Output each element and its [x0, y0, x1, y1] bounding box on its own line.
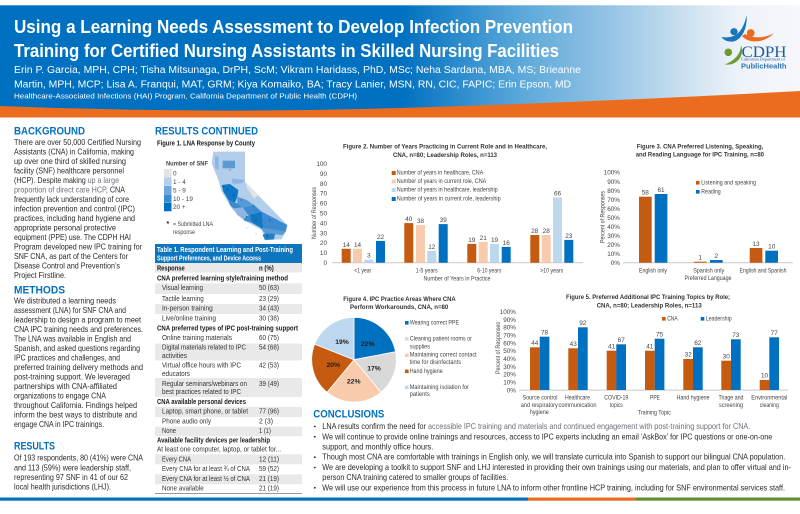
table rows: CNA preferred learning style/training method	[157, 275, 288, 282]
figure 2 values: 40	[405, 216, 413, 223]
figure 3 y axis: 90%	[607, 179, 620, 186]
chart: figure 5	[495, 294, 788, 417]
background text: proportion of direct care HCP, CNA	[14, 184, 125, 194]
background text: Program developed new IPC training for	[14, 242, 142, 252]
figure 3 y axis: 10%	[607, 251, 620, 258]
methods text: partnerships with CNA-affiliated	[14, 381, 117, 391]
table rows: 21 (19)	[259, 486, 279, 493]
methods text: The LNA was available in English and	[14, 334, 131, 344]
map legend: = Submitted LNA	[173, 221, 214, 228]
methods text: engage CNA in IPC trainings.	[14, 419, 104, 429]
table rows: activities	[162, 353, 187, 360]
table rows: Available facility devices per leadership	[157, 438, 270, 445]
background text: frequently lack understanding of core	[14, 194, 129, 204]
figure 5 values: 77	[771, 330, 778, 337]
table rows: None available	[162, 486, 204, 493]
heading: methods: METHODS	[14, 284, 65, 296]
icon: CDPH logo	[722, 15, 787, 70]
figure 2 legend: Number of years in healthcare, leadership	[397, 187, 498, 194]
figure 5 values: 44	[531, 340, 539, 347]
figure 5 values: 41	[608, 343, 615, 350]
pie legend: time for disinfectants	[410, 359, 461, 366]
figure 2 categories: Number of Years in Practice	[424, 275, 491, 282]
figure 2 legend: Number of years in current role, leadership	[397, 196, 501, 203]
figure 3 y axis: 20%	[607, 242, 620, 249]
conclusions bullets: person CNA training catered to smaller groups of facilities.	[322, 472, 508, 482]
header banner	[0, 5, 800, 117]
figure 2 title	[343, 143, 547, 159]
pie legend: Hand hygiene	[410, 368, 443, 375]
pie legend: Maintaining isolation for	[410, 384, 470, 391]
table rows: 21 (19)	[259, 476, 279, 483]
background text: practices, including hand hygiene and	[14, 213, 135, 223]
figure 2 y axis: 100	[316, 161, 327, 168]
figure 2 y axis: 60	[320, 201, 327, 208]
figure 5 categories: Training Topic	[638, 410, 671, 417]
methods text: Spanish, and asked questions regarding	[14, 343, 140, 353]
figure 5 y axis: 80%	[503, 325, 516, 332]
figure 3 legend: Reading	[701, 189, 721, 196]
figure 2 values: 21	[480, 235, 487, 242]
figure 5 values: 67	[618, 337, 625, 344]
table rows: 60 (75)	[259, 335, 279, 342]
figure 3 title	[636, 143, 764, 159]
figure 5 y axis: 70%	[503, 332, 516, 340]
figure 5 y axis: 60%	[503, 340, 516, 347]
pie legend	[405, 320, 477, 398]
conclusions bullets: LNA results confirm the need for accessible IPC training and materials and continued engagement with post-training support for CNA.	[322, 421, 750, 431]
pie labels	[326, 339, 381, 386]
authors: Erin P. Garcia, MPH, CPH; Tisha Mitsunaga, DrPH, ScM; Vikram Haridass, PhD, MSc; Neha Sardana, MBA, MS; Brieanne	[14, 65, 581, 76]
figure 2 values: 28	[531, 228, 539, 235]
figure 3 y axis: Percent of Responses	[600, 191, 606, 243]
map legend: response	[173, 229, 195, 236]
figure 3 categories: English and Spanish	[740, 267, 787, 274]
figure 5 categories: COVID-19	[604, 394, 629, 401]
figure 2 y axis: 30	[320, 230, 327, 237]
figure 3 y axis	[600, 170, 793, 267]
table header: Support Preferences, and Device Access	[157, 256, 261, 262]
figure 5 values: 78	[541, 329, 548, 336]
figure 1 title: Figure 1. LNA Response by County	[157, 141, 255, 148]
panel: table 1	[155, 244, 302, 494]
map legend: *	[166, 221, 170, 228]
panel: left column	[14, 126, 143, 491]
table header: Table 1. Respondent Learning and Post-Training	[157, 247, 293, 254]
figure 5 values: 10	[761, 373, 768, 380]
figure 3 values: 61	[657, 187, 665, 194]
figure 2 y axis: 90	[320, 171, 327, 178]
figure 5 values: 30	[723, 353, 730, 360]
figure 3 values: 1	[699, 255, 703, 262]
figure 2 values: 14	[343, 242, 350, 249]
background text: facility (SNF) healthcare personnel	[14, 166, 124, 176]
figure 5 values	[531, 320, 778, 380]
figure 2 values: 22	[377, 234, 384, 241]
map legend: 5 - 9	[173, 188, 186, 194]
table rows: 1 (1)	[259, 428, 271, 435]
background text: Assistants (CNA) in California, making	[14, 146, 134, 156]
figure 5 y axis: 90%	[503, 317, 516, 324]
background text: There are over 50,000 Certified Nursing	[14, 137, 141, 147]
figure 2 y axis: 20	[320, 240, 327, 247]
table rows: 50 (63)	[259, 285, 279, 292]
figure 3 title: and Reading Language for IPC Training, n=80	[636, 152, 764, 159]
table rows: best practices related to IPC	[162, 389, 241, 396]
results text: representing 97 SNF in 41 of our 62	[14, 472, 128, 482]
figure 2 y axis: 0	[323, 260, 327, 267]
table rows: Tactile learning	[162, 296, 204, 303]
table rows: educators	[162, 371, 190, 378]
table rows: 12 (11)	[259, 456, 279, 463]
results text	[14, 453, 143, 492]
figure 2 legend	[392, 170, 501, 203]
table rows: Every CNA	[162, 456, 191, 463]
pie labels: 19%	[335, 339, 349, 346]
figure 2 categories: 1-5 years	[416, 267, 438, 274]
figure 2 values: 14	[354, 242, 361, 249]
figure 3 values	[642, 187, 776, 262]
figure 5 categories: topics	[610, 402, 623, 409]
pie labels: 20%	[326, 362, 340, 369]
methods text: CNA IPC training needs and preferences.	[14, 324, 143, 334]
map legend: Number of SNF	[166, 161, 208, 168]
figure 2 categories	[354, 267, 563, 282]
table rows: Laptop, smart phone, or tablet	[162, 408, 248, 415]
figure 2 categories: >10 years	[540, 267, 563, 274]
figure 5 categories: PPE	[650, 394, 660, 401]
figure 5 y axis: 0%	[507, 387, 516, 394]
table header	[155, 244, 302, 263]
figure 4 title: Figure 4. IPC Practice Areas Where CNA	[343, 296, 456, 303]
figure 2 bars	[342, 197, 573, 263]
icon: CDPH logo: PublicHealth	[741, 61, 787, 70]
footer colour bar	[0, 498, 800, 501]
figure 5 categories: Triage and	[718, 394, 744, 401]
figure 2 title: Figure 2. Number of Years Practicing in Current Role and in Healthcare,	[343, 143, 547, 150]
background text	[14, 137, 142, 280]
figure 3 y axis: 80%	[607, 188, 620, 195]
methods text: assessment (LNA) for SNF CNA and	[14, 305, 126, 315]
chart: figure 4 pie	[312, 296, 477, 402]
methods text: inform the best ways to distribute and	[14, 410, 137, 420]
table rows: Visual learning	[162, 285, 203, 292]
figure 5 y axis: 10%	[503, 380, 516, 386]
table rows: 42 (53)	[259, 362, 279, 369]
figure 2 legend: Number of years in healthcare, CNA	[397, 170, 484, 177]
background text: SNF CNA, as part of the Centers for	[14, 251, 128, 261]
figure 3 values: 13	[752, 241, 760, 248]
figure 5 values: 73	[732, 332, 740, 339]
figure 2 values: 28	[543, 228, 550, 235]
chart: figure 3	[600, 143, 793, 282]
figure 3 y axis: 100%	[604, 170, 620, 177]
pie legend: Cleaning patient rooms or	[410, 336, 473, 343]
figure 2 values: 3	[367, 253, 371, 260]
heading: background: BACKGROUND	[14, 126, 85, 138]
table rows: 34 (43)	[259, 306, 279, 313]
figure 5 legend	[662, 316, 732, 323]
table rows: 54 (68)	[259, 344, 279, 351]
figure 5 categories: hygiene	[530, 409, 549, 416]
table rows: Every CNA for at least ½ of CNA	[162, 475, 250, 483]
figure 5 y axis: 20%	[503, 372, 516, 379]
figure 2 y axis	[311, 161, 583, 267]
figure 5 categories: Healthcare	[565, 394, 590, 401]
heading: results: RESULTS	[14, 441, 55, 453]
figure 5 y axis: 50%	[503, 348, 516, 355]
figure 5 categories: Hand hygiene	[676, 394, 710, 401]
panel: figure 1 map	[157, 141, 287, 240]
figure 5 y axis: Percent of Responses	[495, 322, 502, 374]
methods text: IPC practices and challenges, and	[14, 353, 120, 363]
table rows: CNA preferred types of IPC post-training support	[157, 325, 299, 332]
figure 5 values: 41	[646, 343, 654, 350]
figure 5 categories: screening	[719, 402, 743, 409]
methods text	[14, 296, 143, 429]
chart: figure 2	[311, 143, 583, 282]
affiliation: Healthcare-Associated Infections (HAI) Program, California Department of Public Health (CDPH)	[14, 92, 358, 100]
pie labels: 22%	[347, 378, 361, 386]
methods text: leadership to design a program to meet	[14, 315, 142, 325]
figure 2 y axis: 80	[320, 181, 327, 188]
figure 2 values: 12	[428, 244, 436, 251]
figure 2 y axis: 70	[320, 191, 327, 198]
figure 2 title: CNA, n=80; Leadership Roles, n=113	[393, 152, 497, 159]
title: Training for Certified Nursing Assistants in Skilled Nursing Facilities	[14, 41, 559, 61]
table rows: CNA available personal devices	[157, 399, 246, 406]
figure 5 title	[566, 294, 730, 310]
figure 2 y axis: Number of Responses	[311, 187, 318, 239]
background text: (HCP). Despite making up a large	[14, 175, 119, 185]
figure 3 title: Figure 3. CNA Preferred Listening, Speaking,	[637, 143, 763, 150]
title: Using a Learning Needs Assessment to Develop Infection Prevention	[14, 17, 573, 37]
table rows: Online training materials	[162, 335, 232, 342]
figure 3 values: 10	[768, 244, 776, 251]
figure 2 y axis: 40	[320, 220, 327, 227]
figure 3 y axis: 30%	[607, 233, 620, 240]
map legend: 1 - 4	[173, 179, 186, 186]
background text: appropriate personal protective	[14, 222, 116, 232]
figure 5 values: 75	[656, 331, 663, 338]
figure 5 categories: cleaning	[760, 402, 779, 409]
figure 4 title	[343, 296, 456, 311]
icon: CDPH logo: CDPH	[742, 44, 786, 61]
figure 5 values: 32	[685, 352, 692, 359]
figure 5 title: Figure 5. Preferred Additional IPC Training Topics by Role;	[566, 294, 730, 301]
conclusions bullets: support, and monthly office hours.	[322, 442, 433, 452]
table rows: n (%)	[259, 265, 274, 272]
background text: equipment (PPE) use. The CDPH HAI	[14, 232, 131, 242]
results text: Of 193 respondents, 80 (41%) were CNA	[14, 453, 143, 463]
pie legend: Maintaining correct contact	[410, 352, 477, 359]
pie legend: patients	[410, 391, 430, 398]
figure 2 values: 39	[440, 217, 447, 224]
map legend: 10 - 19	[173, 196, 193, 203]
figure 2 values: 38	[417, 218, 424, 225]
figure 5 legend: CNA	[667, 316, 678, 323]
figure 5 y axis	[495, 309, 788, 394]
pie labels: 22%	[361, 341, 375, 348]
figure 5 bars	[530, 327, 779, 390]
figure 5 title: CNA, n=80; Leadership Roles, n=113	[597, 303, 702, 310]
table rows: Phone audio only	[162, 419, 211, 426]
title	[14, 17, 573, 61]
table rows: 77 (96)	[259, 408, 279, 415]
results text: and 113 (59%) were leadership staff,	[14, 462, 131, 472]
table rows: Response	[157, 265, 185, 272]
figure 2 y axis: 50	[320, 210, 327, 218]
map legend: 0	[173, 170, 177, 178]
figure 5 values: 43	[570, 341, 577, 348]
table rows: 30 (38)	[259, 316, 279, 323]
figure 3 categories: Preferred Language	[684, 275, 732, 282]
figure 2 values: 23	[565, 233, 573, 240]
figure 5 y axis: 40%	[503, 356, 516, 363]
table rows: Live/online training	[162, 316, 216, 323]
background text: infection prevention and control (IPC)	[14, 204, 135, 214]
figure 2 values: 66	[554, 190, 561, 197]
methods text: We distributed a learning needs	[14, 296, 116, 306]
table row shading	[155, 263, 302, 484]
table rows: 23 (29)	[259, 296, 279, 303]
table rows: Virtual office hours with IPC	[162, 362, 241, 369]
figure 3 y axis: 50%	[607, 215, 620, 222]
table rows: 39 (49)	[259, 381, 279, 388]
figure 5 categories: Environmental	[751, 394, 787, 401]
authors: Martin, MPH, MCP; Lisa A. Franqui, MAT, GRM; Kiya Komaiko, BA; Tracy Lanier, MSN, RN, CIC, FAPIC; Erin Epson, MD	[14, 80, 571, 90]
table rows: Digital materials related to IPC	[162, 344, 246, 351]
map legend	[164, 161, 214, 236]
figure 3 categories	[639, 267, 787, 282]
pie legend: Wearing correct PPE	[410, 320, 459, 327]
table rows: 2 (3)	[259, 419, 273, 426]
figure 3 y axis: 70%	[607, 197, 620, 204]
pie labels: 17%	[367, 366, 381, 372]
figure 3 y axis: 0%	[611, 260, 620, 267]
panel: conclusions	[313, 409, 791, 492]
figure 2 values: 19	[491, 237, 498, 244]
figure 3 values: 58	[642, 190, 649, 197]
table rows: Regular seminars/webinars on	[162, 381, 247, 388]
methods text: preferred training delivery methods and	[14, 362, 143, 372]
pie slices	[312, 317, 396, 402]
background text: Project Firstline.	[14, 270, 66, 280]
table rows: 59 (52)	[259, 466, 279, 473]
background text: up over one third of skilled nursing	[14, 156, 126, 166]
table rows: At least one computer, laptop, or tablet for...	[157, 447, 281, 454]
figure 5 categories: Source control	[522, 394, 558, 401]
figure 5 categories: and respiratory	[521, 402, 558, 409]
figure 3 bars	[639, 194, 778, 263]
pie legend: supplies	[410, 343, 430, 350]
figure 3 categories: Spanish only	[693, 267, 725, 274]
heading: conclusions: CONCLUSIONS	[313, 409, 384, 421]
figure 3 legend: Listening and speaking	[701, 180, 756, 187]
figure 2 values	[343, 190, 573, 260]
table rows: In-person training	[162, 306, 213, 313]
map legend: 20 +	[173, 204, 186, 211]
figure 5 y axis: 30%	[503, 364, 516, 371]
figure 5 values: 92	[579, 320, 587, 327]
icon: CDPH logo: California Department of	[741, 58, 786, 62]
methods text: post-training support. We leveraged	[14, 372, 130, 382]
figure 3 values: 2	[715, 253, 719, 260]
methods text: organizations to engage CNA	[14, 390, 106, 400]
figure 5 categories: communication	[558, 402, 597, 409]
figure 2 values: 16	[503, 240, 510, 247]
figure 5 y axis: 100%	[500, 309, 516, 316]
background text: Disease Control and Prevention’s	[14, 260, 120, 270]
table rows: None	[162, 428, 176, 435]
figure 2 legend: Number of years in current role, CNA	[397, 178, 487, 185]
figure 2 values: 19	[468, 237, 476, 244]
figure 5 categories	[521, 394, 787, 417]
methods text: throughout California. Findings helped	[14, 400, 137, 410]
figure 2 y axis: 10	[320, 250, 327, 257]
figure 3 legend	[696, 180, 756, 196]
map of California	[212, 152, 287, 240]
figure 2 categories: 6-10 years	[477, 267, 501, 274]
conclusions bullets	[314, 421, 791, 492]
figure 4 title: Perform Workarounds, CNA, n=80	[350, 304, 448, 311]
figure 5 values: 62	[694, 340, 702, 347]
table rows: Every CNA for at least ¾ of CNA	[162, 466, 250, 473]
figure 3 y axis: 60%	[607, 206, 620, 213]
results text: local health jurisdictions (LHJ).	[14, 482, 111, 492]
figure 3 categories: English only	[639, 267, 668, 274]
heading: results continued: RESULTS CONTINUED	[155, 126, 258, 138]
figure 3 y axis: 40%	[607, 224, 620, 231]
table rows	[157, 265, 299, 493]
figure 5 legend: Leadership	[706, 316, 732, 323]
authors	[14, 65, 581, 90]
figure 2 categories: <1 year	[354, 267, 372, 274]
